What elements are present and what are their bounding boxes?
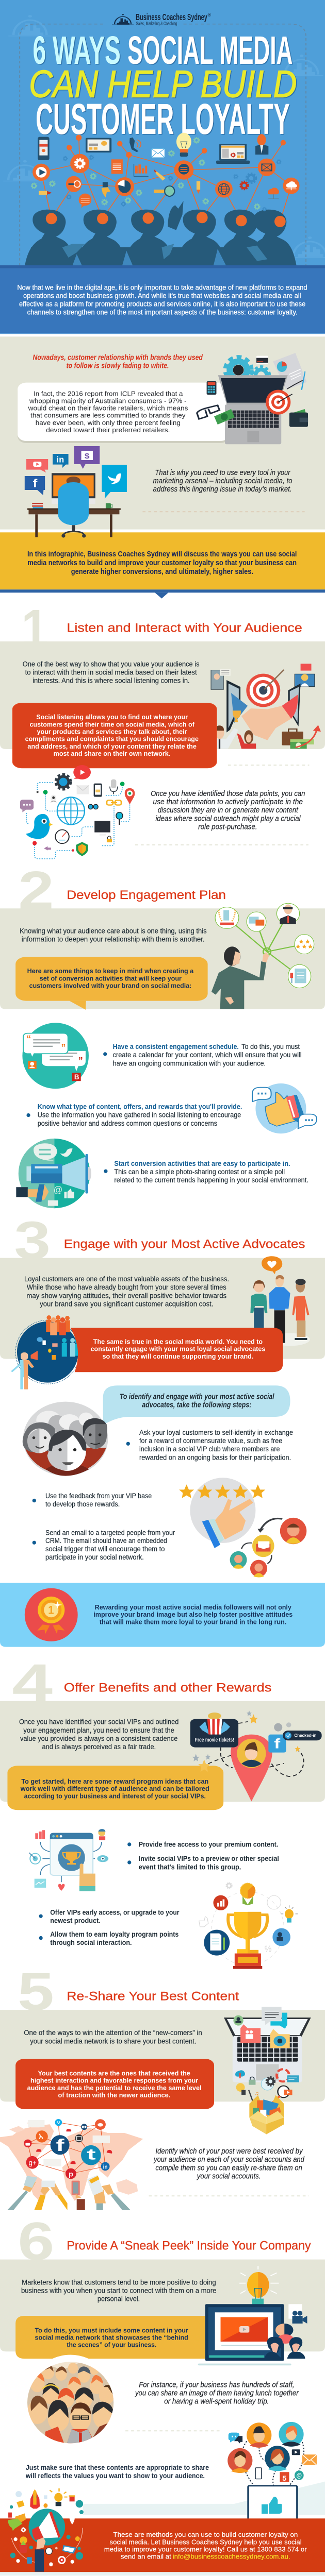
bullets: upgrades and points: Offer VIPs early access, or upgrade to your bbox=[50, 1909, 180, 1917]
silhouettes of people bbox=[25, 201, 297, 265]
red heading bbox=[32, 353, 203, 370]
paragraph: your social media network is to share your best content. bbox=[30, 2038, 197, 2045]
red callout bbox=[15, 2059, 214, 2109]
laptop illustration bbox=[197, 353, 308, 444]
closing text: info@businesscoachessydney.com.au. bbox=[173, 2553, 290, 2561]
yellow speech bubble: customers involved with your brand on social media: bbox=[29, 982, 191, 990]
red callout: Your best contents are the ones that received the bbox=[38, 2070, 190, 2077]
panel: section 5 bbox=[0, 1989, 325, 2210]
paragraph: Once you have identified your social VIPs and outlined bbox=[19, 1718, 178, 1726]
icon: teal chat bubbles: ” bbox=[61, 1042, 66, 1053]
logo: Sales, Marketing & Coaching bbox=[136, 21, 177, 27]
heading: Engage with your Most Active Advocates bbox=[64, 1237, 305, 1251]
bullets: access and preview: Invite social VIPs to a preview or other special bbox=[139, 1855, 279, 1863]
report card bbox=[18, 383, 229, 443]
logo: Business Coaches Sydney bbox=[136, 13, 207, 23]
icon: thumbs up bbox=[252, 1083, 317, 1133]
heading: Re-Share Your Best Content bbox=[67, 1989, 239, 2003]
closing text: send an email at bbox=[121, 2553, 171, 2561]
yellow speech bubble: Here are some things to keep in mind when creating a bbox=[27, 968, 194, 975]
logo: ® bbox=[208, 13, 211, 18]
closing note: will reflects the values you want to show to your audience. bbox=[25, 2472, 205, 2480]
audience circle illustration bbox=[15, 1315, 80, 1384]
paragraph bbox=[24, 1275, 229, 1308]
yellow callout: according to your business and interest of your social VIPs. bbox=[24, 1792, 206, 1800]
paragraph bbox=[21, 2279, 216, 2303]
bullets: access and preview: Provide free access to your premium content. bbox=[139, 1841, 278, 1849]
social media desk illustration: in bbox=[57, 454, 64, 464]
speech bubble bbox=[103, 1385, 290, 1425]
bullet: content types: positive behavior and address common questions or concerns bbox=[38, 1120, 217, 1128]
paragraph bbox=[23, 660, 200, 685]
bullet: VIP feedback: to develop those rewards. bbox=[45, 1500, 120, 1509]
world map with social networks: v bbox=[57, 2120, 60, 2126]
man with network bbox=[212, 903, 314, 1009]
paragraph: business with you when you start to connect with them on a more bbox=[21, 2287, 216, 2295]
yellow callout: To get started, here are some reward program ideas that can bbox=[21, 1778, 208, 1786]
tool callout bbox=[153, 469, 293, 494]
panel: section 1 bbox=[0, 599, 325, 859]
red callout bbox=[12, 703, 217, 768]
social media desk illustration: $ bbox=[85, 452, 90, 461]
closing note bbox=[25, 2464, 209, 2480]
location pin illustration: Free movie tickets! bbox=[195, 1737, 234, 1743]
world map with social networks bbox=[0, 2119, 143, 2210]
red callout: compliments and complaints that you should encourage bbox=[25, 736, 199, 743]
monitor and bulb illustration bbox=[198, 2266, 307, 2365]
panel: rewards strip bbox=[0, 1583, 325, 1647]
panel: rewards strip: 1 bbox=[48, 1604, 54, 1617]
icon: megaphone: @ bbox=[54, 1184, 62, 1195]
paragraph bbox=[20, 927, 207, 943]
title bbox=[29, 28, 297, 143]
closing text bbox=[104, 2531, 307, 2561]
report card: have ever been, with only three percent feeling bbox=[36, 419, 181, 427]
cloud of content icons: ♫ bbox=[254, 2091, 259, 2096]
paragraph: value you provided is always on a consistent cadence bbox=[20, 1735, 177, 1743]
number 6: 6 bbox=[18, 2212, 54, 2272]
bullet: engagement schedule: To do this, you must bbox=[241, 1043, 300, 1051]
red callout bbox=[71, 1328, 283, 1372]
bullets: access and preview bbox=[127, 1841, 279, 1871]
bullet: engagement schedule: have an ongoing communication with your audience. bbox=[113, 1060, 266, 1067]
icon: teal chat bubbles: ” bbox=[78, 1055, 83, 1066]
location pin illustration: Checked-in bbox=[295, 1733, 317, 1738]
paragraph: and is always perceived as a fair trade. bbox=[42, 1743, 156, 1751]
icon cluster bbox=[20, 765, 135, 859]
yellow callout: To do this, you must include some content in your bbox=[35, 2327, 188, 2334]
node icons bbox=[36, 159, 297, 195]
red heading: to follow is slowly fading to white. bbox=[67, 362, 169, 370]
bullet: self-identify: inclusion in a social VIP club where members are bbox=[139, 1445, 280, 1453]
icon: teal chat bubbles: B bbox=[74, 1074, 79, 1081]
red callout: of traction with the newer audience. bbox=[58, 2092, 170, 2099]
red callout: audience and has the potential to receive the same level bbox=[27, 2084, 202, 2092]
icon: referral avatars bbox=[230, 1518, 306, 1578]
red callout: customers spend their time on social media, which of bbox=[29, 721, 194, 728]
social media desk illustration: f bbox=[32, 478, 38, 490]
paragraph: Knowing what your audience care about is one thing, using this bbox=[20, 927, 207, 935]
world map with social networks: t bbox=[87, 2146, 96, 2163]
bullets: access and preview: event that's limited to this group. bbox=[139, 1863, 241, 1871]
bullets: upgrades and points: newest product. bbox=[50, 1917, 101, 1925]
yellow callout bbox=[7, 1759, 223, 1810]
megaphone illustration bbox=[8, 2488, 84, 2572]
small gears bbox=[31, 138, 281, 211]
panel: yellow banner: generate higher conversions, and ultimately, higher sales. bbox=[71, 568, 253, 576]
paragraph: your engagement plan, you need to ensure that the bbox=[23, 1726, 174, 1735]
yellow speech bubble: set of conversion activities that will keep your bbox=[40, 975, 182, 982]
red callout: so that they will continue supporting your brand. bbox=[102, 1353, 253, 1361]
report card: In fact, the 2016 report from ICLP revealed that a bbox=[34, 390, 183, 397]
bullet: VIP feedback: Use the feedback from your VIP base bbox=[45, 1492, 152, 1500]
panel: yellow banner bbox=[0, 532, 325, 599]
panel: section 6 bbox=[0, 2212, 325, 2524]
red callout: most and share on their own network. bbox=[54, 750, 170, 758]
yellow speech bubble bbox=[15, 957, 208, 1010]
paragraph: your brand save you significant customer acquisition cost. bbox=[40, 1300, 213, 1308]
handshake illustration bbox=[209, 664, 321, 749]
crowd illustration bbox=[25, 2355, 116, 2446]
number 3: 3 bbox=[14, 1211, 51, 1270]
bullets: upgrades and points: Allow them to earn loyalty program points bbox=[50, 1930, 178, 1939]
paragraph bbox=[24, 2029, 202, 2045]
panel: section 2 bbox=[0, 860, 325, 1208]
bullets: upgrades and points: through social interaction. bbox=[50, 1939, 132, 1947]
panel: intro bbox=[0, 268, 325, 334]
red callout: highest interaction and favorable responses from your bbox=[30, 2077, 198, 2084]
panel: rewards strip: that will make them more loyal to your brand in the long run. bbox=[100, 1619, 286, 1626]
team avatars on laptop: 5 bbox=[282, 2475, 287, 2483]
italic callout: role post-purchase. bbox=[198, 823, 257, 831]
report card: devoted toward their preferred retailers. bbox=[46, 426, 170, 434]
bullet: conversion activities bbox=[104, 1160, 308, 1184]
three customers with heart bbox=[250, 1256, 310, 1346]
number 5: 5 bbox=[18, 1962, 54, 2022]
paragraph: to interact with them in social media based on their latest bbox=[25, 669, 197, 676]
bullet: content types: Know what type of content, offers, and rewards that you'll provide. bbox=[38, 1103, 242, 1111]
standing figures bbox=[11, 1360, 34, 1389]
panel: section 3 bbox=[0, 1211, 325, 1647]
italic callout bbox=[153, 2147, 305, 2180]
paragraph: interests. And this is where social listening comes in. bbox=[32, 677, 190, 685]
report card: would cheat on their favorite retailers, which means bbox=[28, 404, 188, 412]
icon: trophy and achievements: % bbox=[265, 1944, 271, 1954]
world map with social networks: in bbox=[103, 2163, 108, 2170]
red heading: Nowadays, customer relationship with brands they used bbox=[32, 353, 203, 362]
network lines bbox=[41, 138, 291, 222]
paragraph: personal level. bbox=[98, 2295, 140, 2303]
world map with social networks: f bbox=[56, 2136, 64, 2155]
red callout: and address, and which of your content they relate the bbox=[27, 743, 197, 751]
location pin illustration bbox=[190, 1710, 322, 1802]
paragraph bbox=[19, 1718, 178, 1751]
bullet: self-identify bbox=[126, 1429, 293, 1462]
paragraph: Marketers know that customers tend to be more positive to doing bbox=[22, 2279, 216, 2286]
number 4: 4 bbox=[12, 1653, 53, 1713]
icon: stars and pointing hand bbox=[179, 1478, 265, 1548]
bullet: email: CRM. The email should have an embedded bbox=[45, 1537, 167, 1545]
number 1: 1 bbox=[21, 599, 48, 658]
heading: Listen and Interact with Your Audience bbox=[67, 621, 302, 635]
red callout: constantly engage with your most loyal social advocates bbox=[91, 1346, 265, 1353]
bullet: email bbox=[32, 1529, 175, 1562]
panel: section 4 bbox=[0, 1653, 325, 2022]
icon: three faces bbox=[23, 1402, 108, 1476]
social media desk illustration bbox=[25, 446, 127, 538]
network nodes bbox=[32, 135, 300, 227]
paragraph: One of the ways to win the attention of the “new-comers” in bbox=[24, 2029, 202, 2037]
yellow callout: social media network that showcases the “behind bbox=[35, 2334, 188, 2342]
heading: Offer Benefits and other Rewards bbox=[64, 1681, 271, 1694]
yellow callout: the scenes” of your business. bbox=[67, 2342, 156, 2349]
world map with social networks: g+ bbox=[28, 2159, 37, 2167]
red callout: Social listening allows you to find out where your bbox=[36, 714, 188, 721]
cloud of content icons bbox=[235, 2069, 299, 2134]
team avatars on laptop bbox=[228, 2422, 317, 2524]
title: 6 WAYS bbox=[32, 28, 121, 73]
panel: hero bbox=[0, 0, 325, 268]
bullet: email: social trigger that will encourage them to bbox=[45, 1546, 165, 1553]
pale background wave bbox=[83, 2482, 325, 2515]
laptop sharing illustration bbox=[224, 2007, 311, 2082]
icon: trophy and achievements bbox=[199, 1883, 298, 1969]
heading: Develop Engagement Plan bbox=[67, 888, 226, 902]
team avatars on laptop: @ bbox=[297, 2472, 302, 2479]
paragraph: Loyal customers are one of the most valuable assets of the business. bbox=[24, 1275, 229, 1283]
icon: teal chat bubbles bbox=[22, 1023, 89, 1089]
location pin illustration: f bbox=[274, 1736, 280, 1752]
bullet: email: Send an email to a targeted people from your bbox=[45, 1529, 175, 1537]
bullets: upgrades and points bbox=[39, 1909, 180, 1947]
icons: devices and objects bbox=[38, 133, 279, 208]
closing note: Just make sure that these contents are appropriate to share bbox=[26, 2464, 209, 2472]
bullet: email: participate in your social network. bbox=[45, 1554, 144, 1562]
paragraph: information to deepen your relationship with them is another. bbox=[22, 936, 205, 943]
panel: call to action bbox=[0, 2488, 325, 2575]
red callout: your products and services they talk about, their bbox=[37, 728, 187, 736]
italic callout: or having a well-spent holiday trip. bbox=[164, 2398, 269, 2405]
bullet: engagement schedule bbox=[103, 1043, 302, 1067]
number 2: 2 bbox=[18, 860, 54, 920]
bullet: VIP feedback bbox=[32, 1492, 152, 1509]
yellow callout: work well with different type of audience and can be tailored bbox=[20, 1785, 209, 1793]
paragraph: While those who have already bought from your store several times bbox=[27, 1283, 226, 1292]
icon: teal chat bubbles: “ bbox=[26, 1033, 31, 1045]
paragraph: may show varying attitudes, their overall positive behavior towards bbox=[26, 1292, 226, 1300]
bullet: content types: Use the information you have gathered in social listening to encourage bbox=[38, 1111, 241, 1119]
bullet: engagement schedule: Have a consistent engagement schedule. bbox=[113, 1043, 239, 1051]
paragraph: One of the best way to show that you value your audience is bbox=[23, 660, 200, 668]
world map with social networks: p bbox=[69, 2171, 73, 2178]
italic callout: your social accounts. bbox=[197, 2173, 261, 2180]
yellow callout bbox=[15, 2316, 209, 2359]
italic callout bbox=[151, 790, 305, 831]
bullet: content types bbox=[26, 1103, 242, 1128]
report card: that consumers are less committed to brands they bbox=[30, 412, 186, 419]
speech bubble: advocates, take the following steps: bbox=[142, 1401, 251, 1409]
report card: whopping majority of Australian consumers - 97% - bbox=[29, 397, 187, 404]
icon: trophy window bbox=[29, 1829, 108, 1891]
red callout: The same is true in the social media world. You need to bbox=[93, 1338, 263, 1346]
logo bbox=[112, 13, 211, 27]
panel: context bbox=[0, 336, 325, 538]
icon: megaphone bbox=[16, 1139, 91, 1208]
italic callout bbox=[135, 2381, 299, 2405]
